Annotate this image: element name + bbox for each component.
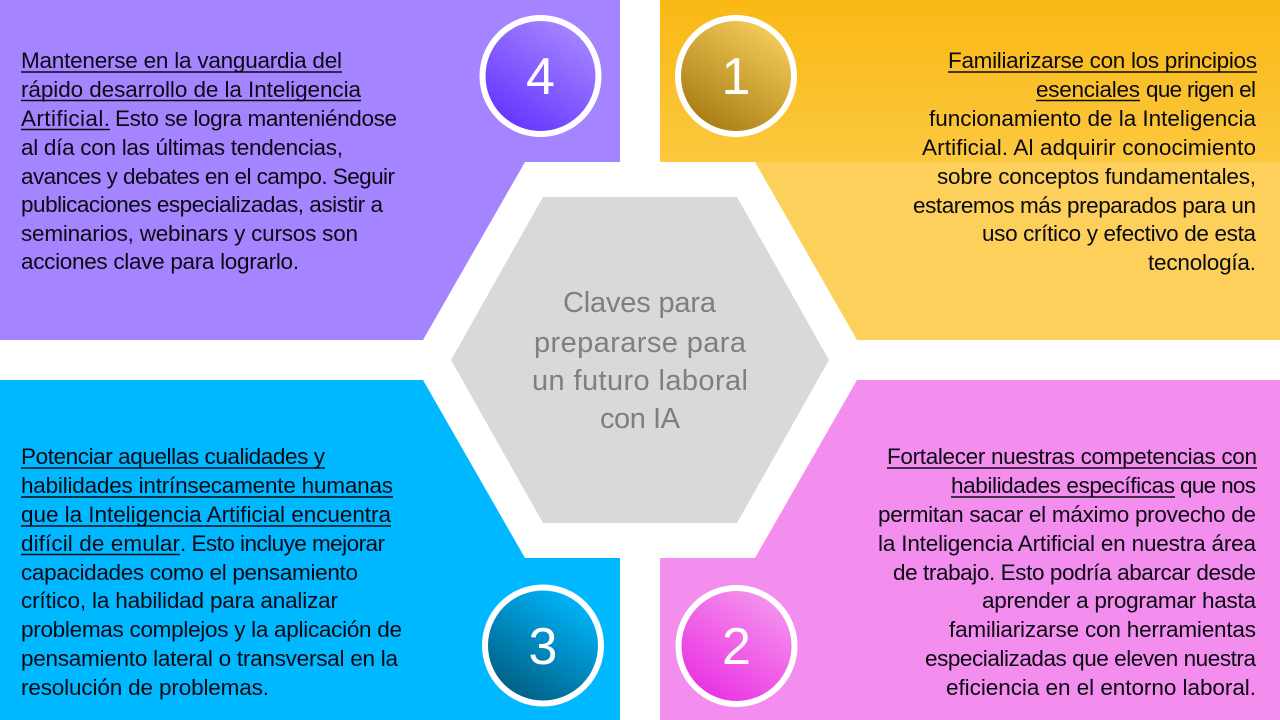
text block: panel 4: Esto se logra manteniéndose [115,106,397,131]
text block: panel 3: capacidades como el pensamiento [21,560,358,585]
text block: panel 3: . Esto incluye mejorar [180,531,386,556]
text block: panel 4: Artificial. [21,106,110,131]
text block: panel 3: pensamiento lateral o transversal en la [21,646,398,671]
text block: panel 4 [21,48,397,274]
text block: panel 2: eficiencia en el entorno laboral. [946,675,1256,700]
icon: number 3 badge [485,588,601,704]
icon: number 1 badge: 1 [722,48,750,106]
text block: panel 1: que rigen el [1146,77,1256,102]
text block: panel 2: familiarizarse con herramientas [949,617,1256,642]
title: Claves para [563,287,717,319]
panel 4: purple [0,0,620,340]
text block: panel 3: crítico, la habilidad para analizar [21,588,338,613]
panel 2: pink [660,380,1280,720]
text block: panel 3 [21,444,402,700]
icon: number 4 badge [482,18,598,134]
text block: panel 2: especializadas que eleven nuestra [925,646,1256,671]
text block: panel 4: avances y debates en el campo. Seguir [21,164,396,189]
title: con IA [600,403,681,435]
panel 3: blue [0,380,620,720]
text block: panel 4: rápido desarrollo de la Inteligencia [21,77,361,102]
text block: panel 2: habilidades específicas [951,473,1175,498]
text block: panel 4: acciones clave para lograrlo. [21,249,299,274]
text block: panel 3: habilidades intrínsecamente humanas [21,473,393,498]
panel 1: amber [660,0,1280,340]
text block: panel 2: permitan sacar el máximo provecho de [878,502,1256,527]
text block: panel 1: Artificial. Al adquirir conocimiento [922,135,1256,160]
text block: panel 3: Potenciar aquellas cualidades y [21,444,326,469]
text block: panel 2: la Inteligencia Artificial en nuestra área [878,531,1256,556]
text block: panel 2: que nos [1180,473,1256,498]
text block: panel 3: difícil de emular [21,531,180,556]
text block: panel 4: seminarios, webinars y cursos son [21,221,358,246]
text block: panel 2: aprender a programar hasta [982,588,1256,613]
text block: panel 3: que la Inteligencia Artificial encuentra [21,502,391,527]
title: prepararse para [534,327,747,359]
icon: number 2 badge: 2 [722,618,751,676]
text block: panel 3: problemas complejos y la aplicación de [21,617,402,642]
text block: panel 1: sobre conceptos fundamentales, [937,164,1256,189]
text block: panel 4: publicaciones especializadas, asistir a [21,192,383,217]
title [532,287,748,435]
icon: number 1 badge [678,18,794,134]
text block: panel 1: Familiarizarse con los principios [948,48,1257,73]
text block: panel 3: resolución de problemas. [21,675,269,700]
text block: panel 2: de trabajo. Esto podría abarcar desde [893,560,1256,585]
text block: panel 1: funcionamiento de la Inteligencia [929,106,1256,131]
text block: panel 4: al día con las últimas tendencias, [21,135,343,160]
text block: panel 4: Mantenerse en la vanguardia del [21,48,342,73]
text block: panel 1 [913,48,1257,275]
text block: panel 1: uso crítico y efectivo de esta [982,221,1256,246]
text block: panel 1: estaremos más preparados para un [913,193,1256,218]
central hexagon [451,197,829,523]
icon: number 2 badge [678,588,794,704]
text block: panel 1: esenciales [1036,77,1140,102]
text block: panel 2: Fortalecer nuestras competencias con [887,444,1257,469]
text block: panel 2 [878,444,1257,700]
icon: number 4 badge: 4 [526,48,555,106]
text block: panel 1: tecnología. [1148,250,1256,275]
icon: number 3 badge: 3 [529,618,557,676]
title: un futuro laboral [532,365,748,397]
